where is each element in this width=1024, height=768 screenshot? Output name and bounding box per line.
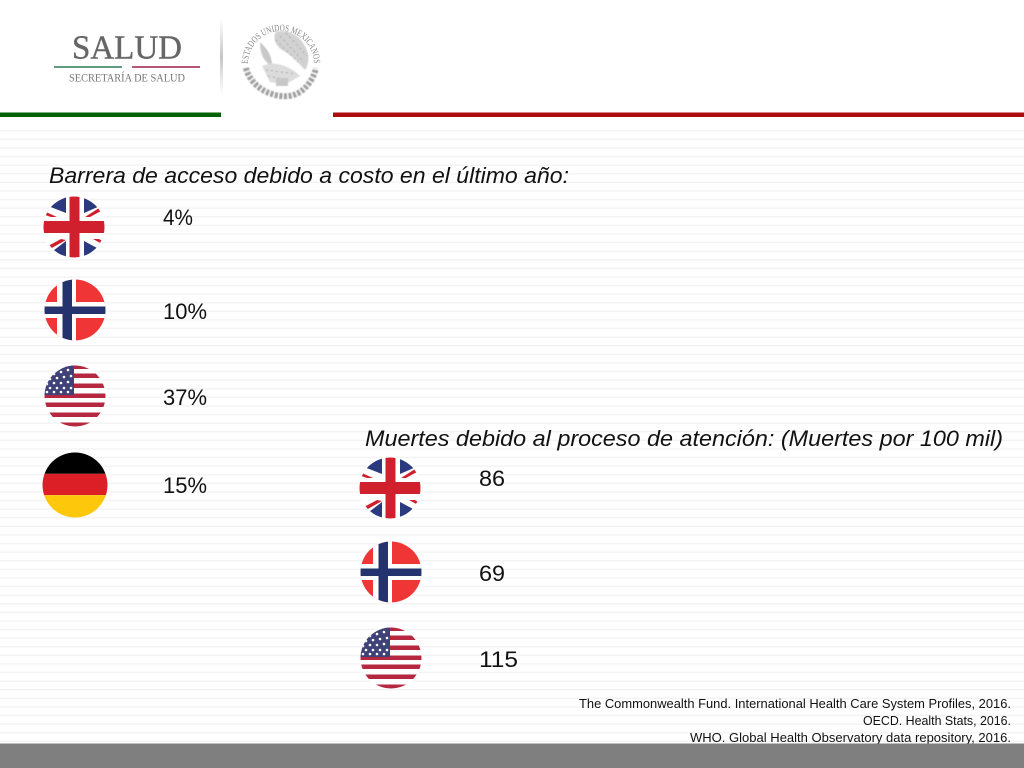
row: United Kingdom: 86 — [479, 466, 505, 491]
heading: cost barrier: Barrera de acceso debido a costo en el último año: — [49, 163, 569, 188]
header divider — [220, 18, 223, 96]
source references: WHO. Global Health Observatory data repository, 2016. — [690, 730, 1011, 745]
panel: cost barrier to access — [42, 163, 569, 518]
header: Secretaría de Salud logo — [54, 30, 200, 84]
row: United Kingdom — [42, 196, 193, 258]
header: Secretaría de Salud logo: SALUD — [72, 30, 182, 66]
header rule: red — [333, 112, 1024, 117]
row: Norway — [44, 279, 207, 341]
striped page background — [0, 130, 1024, 744]
row: United States: 37% — [163, 385, 207, 410]
panel: deaths due to care process — [358, 426, 1003, 690]
row: United States — [44, 364, 207, 428]
row: United Kingdom — [358, 456, 505, 520]
row: Norway: 69 — [479, 561, 505, 586]
row: Norway — [360, 541, 505, 603]
header rule: green — [0, 112, 221, 117]
source references: The Commonwealth Fund. International Health Care System Profiles, 2016. — [579, 696, 1011, 711]
row: United States: 115 — [479, 647, 518, 672]
row: Germany — [42, 452, 207, 518]
heading: deaths: Muertes debido al proceso de atención: (Muertes por 100 mil) — [365, 426, 1003, 451]
row: Norway: 10% — [163, 299, 207, 324]
row: United Kingdom: 4% — [163, 205, 193, 230]
source references — [579, 696, 1011, 745]
icon: national seal of Mexico — [242, 24, 320, 100]
source references: OECD. Health Stats, 2016. — [863, 713, 1011, 728]
footer bar — [0, 744, 1024, 768]
row: United States — [360, 626, 518, 690]
icon: national seal of Mexico: ESTADOS UNIDOS MEXICANOS — [242, 24, 320, 64]
row: Germany: 15% — [163, 473, 207, 498]
header: Secretaría de Salud logo: SECRETARÍA DE SALUD — [69, 70, 185, 84]
